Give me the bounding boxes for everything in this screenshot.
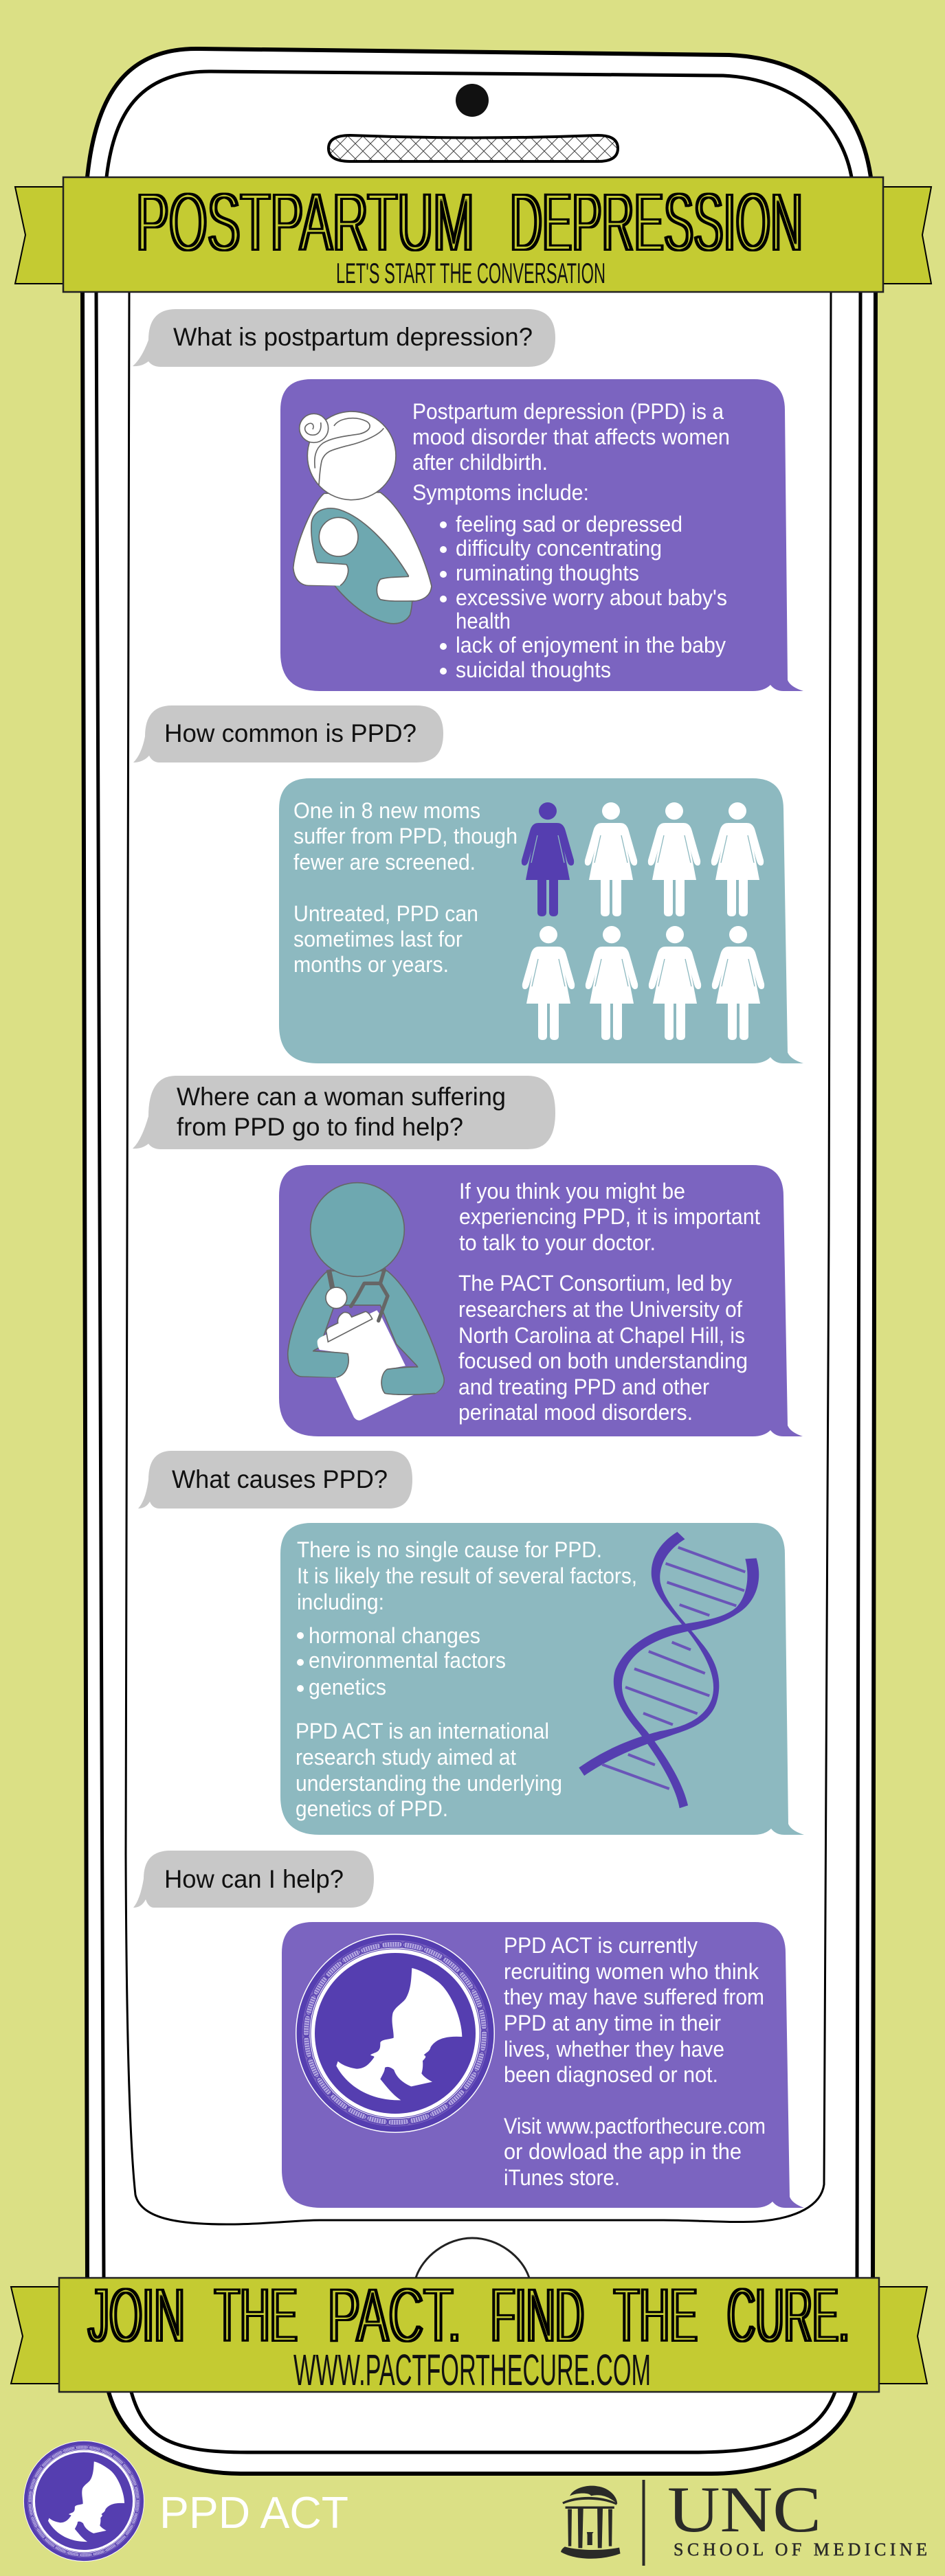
text: prevalence: months or years.	[293, 952, 449, 977]
speaker	[329, 135, 618, 161]
text: prevalence: Untreated, PPD can	[293, 901, 478, 926]
list: symptoms: excessive worry about baby's	[456, 585, 727, 610]
answer panel 5: how to help	[282, 1922, 804, 2208]
text: talk to your doctor: and treating PPD and other	[458, 1375, 709, 1399]
logo: PPD ACT	[23, 2441, 348, 2562]
phone inner edge	[96, 71, 860, 2452]
icon: doctor with clipboard	[288, 1183, 444, 1421]
text: talk to your doctor: The PACT Consortium, led by	[458, 1271, 732, 1296]
list: causes: environmental factors	[309, 1648, 506, 1673]
question bubble 5: How can I help?	[164, 1865, 344, 1893]
call to action: THE	[214, 2272, 298, 2358]
answer panel 3: where to find help	[279, 1165, 803, 1436]
text: talk to your doctor: focused on both understanding	[458, 1348, 748, 1373]
text: no single cause: There is no single cause for PPD.	[297, 1537, 602, 1562]
text: definition: Postpartum depression (PPD) is a	[412, 399, 724, 424]
answer panel 1: what is PPD	[280, 379, 803, 691]
home button	[416, 2238, 529, 2278]
text: talk to your doctor: researchers at the University of	[458, 1297, 742, 1322]
text: prevalence: suffer from PPD, though	[293, 824, 518, 848]
question bubble 2	[133, 705, 443, 762]
text: talk to your doctor: to talk to your doctor.	[459, 1230, 656, 1255]
text: prevalence: One in 8 new moms	[293, 798, 480, 823]
text: recruiting: PPD ACT is currently	[504, 1933, 698, 1958]
title: POSTPARTUM	[136, 175, 474, 269]
text: recruiting: lives, whether they have	[504, 2037, 724, 2061]
text: PPD ACT study	[296, 1719, 562, 1821]
text: talk to your doctor: experiencing PPD, it is important	[459, 1204, 760, 1229]
text: PPD ACT study: understanding the underlying	[296, 1771, 562, 1796]
phone illustration	[82, 49, 876, 2474]
banner body	[59, 2278, 879, 2392]
text: recruiting: recruiting women who think	[504, 1959, 759, 1984]
text: PPD ACT study: genetics of PPD.	[296, 1796, 448, 1821]
question bubble 1	[133, 309, 555, 367]
call to action: FIND	[491, 2272, 584, 2358]
question bubble 1: What is postpartum depression?	[173, 323, 533, 351]
camera	[456, 84, 489, 117]
text: recruiting: PPD at any time in their	[504, 2011, 721, 2035]
text: recruiting: they may have suffered from	[504, 1985, 764, 2009]
list: symptoms: lack of enjoyment in the baby	[456, 633, 726, 657]
text: definition	[412, 399, 730, 505]
bottom banner	[11, 2272, 927, 2395]
text: no single cause	[297, 1537, 637, 1614]
list: symptoms: suicidal thoughts	[456, 657, 611, 682]
call to action: THE	[614, 2272, 698, 2358]
question bubble 4	[138, 1451, 412, 1509]
banner tails	[11, 2287, 59, 2384]
list: symptoms: feeling sad or depressed	[456, 512, 682, 536]
list: symptoms: health	[456, 609, 511, 633]
banner body	[63, 177, 883, 292]
question bubble 3: Where can a woman suffering	[177, 1083, 506, 1111]
answer panel 4: causes	[280, 1523, 804, 1835]
wordmark: UNC	[667, 2473, 821, 2546]
website: WWW.PACTFORTHECURE.COM	[293, 2345, 651, 2395]
list: symptoms	[440, 512, 727, 682]
icon: mother and baby	[293, 411, 432, 624]
list: symptoms: ruminating thoughts	[456, 561, 639, 585]
text: recruiting: Visit www.pactforthecure.com	[504, 2114, 766, 2138]
text: prevalence	[293, 798, 518, 977]
pictogram: one in eight women	[522, 802, 764, 1040]
divider	[642, 2480, 645, 2566]
call to action	[88, 2272, 849, 2358]
list: symptoms: difficulty concentrating	[456, 536, 662, 561]
icon: DNA helix	[579, 1532, 759, 1808]
school name: SCHOOL OF MEDICINE	[674, 2540, 927, 2560]
list: causes: hormonal changes	[309, 1623, 480, 1648]
text: talk to your doctor	[458, 1179, 760, 1425]
icon: old well	[561, 2486, 621, 2559]
text: recruiting	[504, 1933, 766, 2190]
list: causes	[297, 1623, 506, 1699]
text: definition: Symptoms include:	[412, 480, 589, 505]
text: prevalence: fewer are screened.	[293, 850, 476, 874]
question bubble 4: What causes PPD?	[172, 1465, 388, 1493]
icon: PPD ACT seal	[296, 1934, 495, 2133]
text: no single cause: It is likely the result of several factors,	[297, 1563, 637, 1588]
text: recruiting: iTunes store.	[504, 2165, 620, 2190]
call to action: PACT.	[328, 2272, 461, 2358]
question bubble 5	[133, 1851, 374, 1908]
top banner	[15, 175, 931, 292]
question bubble 2: How common is PPD?	[164, 719, 416, 747]
text: recruiting: or dowload the app in the	[504, 2139, 742, 2164]
list: causes: genetics	[309, 1675, 386, 1699]
call to action: JOIN	[88, 2272, 185, 2358]
phone outer body	[82, 49, 876, 2474]
text: prevalence: sometimes last for	[293, 927, 463, 951]
text: talk to your doctor: If you think you might be	[459, 1179, 685, 1204]
text: PPD ACT study: research study aimed at	[296, 1745, 516, 1770]
text: PPD ACT study: PPD ACT is an international	[296, 1719, 549, 1743]
logo: UNC School of Medicine	[561, 2473, 927, 2566]
text: talk to your doctor: North Carolina at Chapel Hill, is	[458, 1323, 745, 1348]
question bubble 3: from PPD go to find help?	[177, 1113, 463, 1141]
logo: PPD ACT: PPD ACT	[159, 2487, 348, 2538]
question bubble 3	[133, 1076, 555, 1149]
phone screen	[126, 292, 831, 2224]
text: recruiting: been diagnosed or not.	[504, 2062, 718, 2087]
text: no single cause: including:	[297, 1590, 384, 1614]
banner tails	[15, 187, 63, 284]
subtitle: LET'S START THE CONVERSATION	[336, 257, 605, 289]
text: talk to your doctor: perinatal mood disorders.	[458, 1400, 693, 1425]
answer panel 2: how common	[279, 778, 803, 1063]
text: definition: after childbirth.	[412, 450, 548, 475]
text: definition: mood disorder that affects women	[412, 425, 730, 449]
